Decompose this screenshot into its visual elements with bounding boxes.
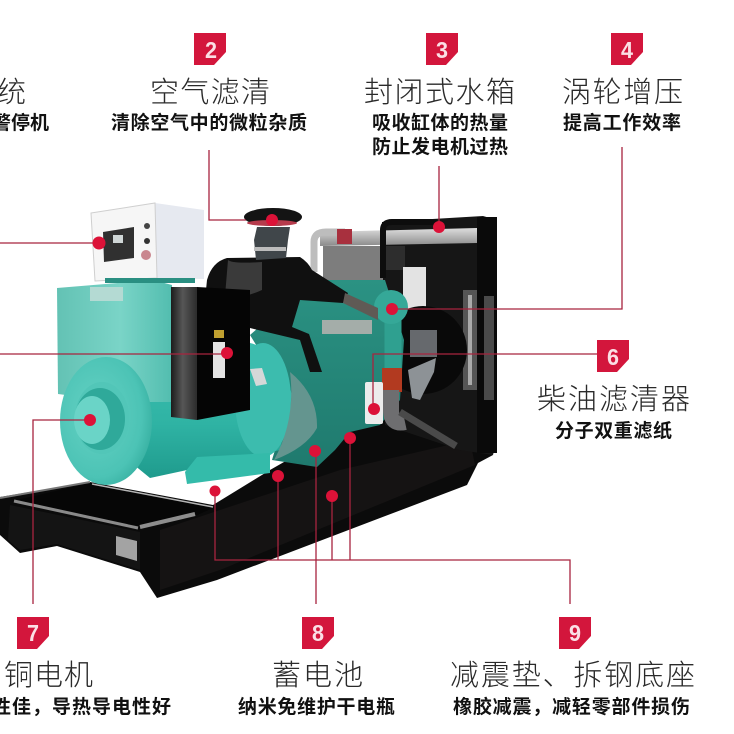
item 3: closed water tank: 防止发电机过热 xyxy=(372,135,508,158)
item 2: air filter xyxy=(111,33,307,134)
alternator body xyxy=(120,343,317,484)
engine block xyxy=(250,280,456,467)
item 9: damping pads and steel base: 9 xyxy=(569,620,581,646)
item 6: diesel filter: 柴油滤清器 xyxy=(537,383,690,416)
item 2: air filter: 清除空气中的微粒杂质 xyxy=(111,111,307,134)
item 3: closed water tank: 吸收缸体的热量 xyxy=(372,111,508,134)
junction box xyxy=(171,287,250,420)
item 8: battery: 8 xyxy=(312,620,324,646)
air filter xyxy=(205,208,378,372)
item 7: copper motor: 铜电机 xyxy=(4,659,93,692)
radiator xyxy=(314,216,497,455)
item 4: turbocharger xyxy=(562,33,683,134)
item 1: control system (cropped) xyxy=(0,76,49,134)
item 6: diesel filter xyxy=(537,340,690,442)
alternator end bell xyxy=(60,357,152,485)
item 4: turbocharger: 涡轮增压 xyxy=(562,76,683,109)
leader lines xyxy=(0,147,622,604)
item 8: battery: 纳米免维护干电瓶 xyxy=(238,695,395,718)
item 8: battery xyxy=(238,617,395,718)
item 3: closed water tank xyxy=(364,33,515,158)
item 7: copper motor: 7 xyxy=(27,620,39,646)
control panel box xyxy=(91,203,204,283)
item 4: turbocharger: 提高工作效率 xyxy=(563,111,681,134)
callout dots xyxy=(84,214,445,502)
QR label xyxy=(250,368,267,386)
item 3: closed water tank: 3 xyxy=(436,37,448,63)
item 6: diesel filter: 分子双重滤纸 xyxy=(555,419,672,442)
item 9: damping pads and steel base: 减震垫、拆钢底座 xyxy=(450,659,695,692)
item 7: copper motor xyxy=(0,617,171,718)
base frame xyxy=(0,418,493,598)
item 9: damping pads and steel base xyxy=(450,617,695,718)
item 3: closed water tank: 封闭式水箱 xyxy=(364,76,515,109)
generator set illustration xyxy=(0,203,497,598)
item 4: turbocharger: 4 xyxy=(621,37,633,63)
alternator housing xyxy=(57,280,172,402)
item 6: diesel filter: 6 xyxy=(607,344,619,370)
item 8: battery: 蓄电池 xyxy=(272,659,363,692)
item 2: air filter: 2 xyxy=(205,37,217,63)
item 2: air filter: 空气滤清 xyxy=(150,76,270,109)
item 9: damping pads and steel base: 橡胶减震，减轻零部件损伤 xyxy=(453,695,690,718)
